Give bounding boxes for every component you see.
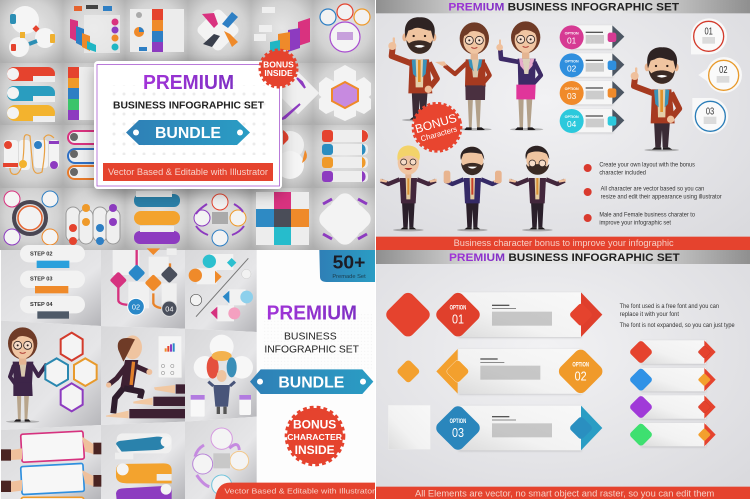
character: large man pointing (631, 47, 679, 151)
footer band (376, 237, 750, 250)
bullet 1: character included (599, 170, 646, 177)
font notes: The font used is a free font and you can (620, 303, 719, 310)
running businessman (106, 335, 152, 413)
teardrop 03: 03 (706, 106, 714, 117)
bullet 3 (584, 212, 695, 227)
footer band: Business character bonus to improve your infographic (454, 238, 674, 248)
tile: multi-ring circle (4, 191, 58, 245)
teardrop 02: 02 (719, 65, 728, 76)
tile: rotated diamond blobs (195, 7, 241, 53)
bundle ribbon (126, 120, 250, 145)
option 04: 04 (567, 119, 577, 129)
tile: four lobes (316, 190, 374, 248)
step 04: STEP 04 (30, 302, 53, 308)
header bar: PREMIUM (448, 2, 504, 14)
bonus characters badge (408, 98, 466, 156)
bullet 2: resize and edit their appearance using illustrator (601, 194, 722, 201)
title premium: PREMIUM (267, 301, 357, 324)
header bar (376, 0, 750, 14)
header bar: BUSINESS INFOGRAPHIC SET (508, 2, 679, 14)
card subtitle: BUSINESS INFOGRAPHIC SET (113, 100, 264, 112)
font notes: The font is not expanded, so you can just type (620, 322, 735, 329)
teardrop 02 (698, 57, 742, 93)
snake flow chart (110, 248, 178, 316)
bonus character seal: INSIDE (295, 443, 335, 457)
option 03 (560, 81, 624, 105)
option 01: OPTION (565, 31, 579, 35)
framed cards with hands (1, 431, 101, 499)
swatch: red diamond (383, 290, 433, 339)
step 02: STEP 02 (30, 251, 53, 257)
collage backgrounds (1, 250, 257, 499)
small banner purple (629, 395, 716, 419)
bonus character seal: CHARACTER (287, 432, 343, 442)
tile: wiggle capsules (3, 135, 59, 174)
bullet 3: Male and Female business charater to (599, 212, 695, 219)
small banner blue (629, 367, 716, 392)
cover card (94, 61, 282, 189)
teardrop 01 (691, 18, 727, 54)
option 03 banner (433, 403, 602, 453)
50+ premade badge (319, 250, 375, 282)
red tagline band: Vector Based & Editable with Illustrator (108, 167, 268, 177)
small banners (629, 340, 716, 447)
option 02: 02 (567, 63, 577, 73)
50+ premade badge: Premade Set (332, 274, 366, 280)
panel: bundle cover collage (0, 0, 375, 250)
woman with hexagons (6, 327, 47, 423)
small banner red (629, 340, 716, 364)
bundle ribbon: BUNDLE (155, 125, 221, 142)
option 03: 03 (567, 91, 577, 101)
option 02: OPTION (565, 59, 579, 63)
bundle ribbon (250, 369, 373, 394)
swatch: orange diamond (396, 359, 421, 384)
option 02 banner: OPTION (572, 362, 589, 368)
card title: PREMIUM (143, 72, 234, 94)
world map dots (263, 313, 373, 370)
character: bearded man thumbs up (444, 147, 502, 231)
stair arms (106, 384, 185, 418)
step 03: STEP 03 (30, 277, 53, 283)
bullet 3: improve your infographic set (599, 220, 671, 227)
option 03 banner: 03 (452, 425, 464, 440)
bullet 2 (584, 186, 722, 201)
option list (560, 25, 624, 133)
diagonal timeline (189, 254, 253, 321)
bonus character seal: BONUS (293, 418, 336, 432)
tile: hexagon ring (319, 65, 371, 121)
lobes with manager (191, 335, 253, 417)
small banner green (629, 422, 716, 447)
bonus character seal (287, 408, 343, 464)
red tagline band: Vector Based & Editable with Illustrator (224, 488, 376, 495)
subtitle: BUSINESS (284, 332, 337, 343)
character: woman presenting (435, 22, 492, 131)
red tagline band (103, 163, 273, 181)
character: man pointing (388, 17, 437, 121)
footer band: All Elements are vector, no smart object and raster, so you can edit them (415, 489, 714, 499)
hexagons (45, 333, 97, 411)
bundle ribbon: BUNDLE (278, 374, 344, 391)
option 02 banner: 02 (575, 368, 587, 383)
50+ premade badge: 50+ (333, 251, 365, 272)
tile: five number squares (68, 67, 94, 120)
teardrop 03 (692, 98, 728, 134)
option 01 banner (433, 290, 602, 339)
character: bearded man glasses (509, 146, 566, 231)
option 02 (560, 53, 624, 77)
red tagline band (215, 483, 376, 499)
tile: three pills (7, 67, 55, 122)
option 01 banner: OPTION (450, 306, 466, 312)
bonus inside seal: INSIDE (264, 68, 293, 78)
bullet points (584, 162, 722, 227)
option 03 banner: OPTION (450, 419, 466, 425)
tile: cycle circles (194, 194, 246, 246)
bonus inside seal: BONUS (263, 60, 294, 70)
bonus characters badge: Characters (420, 124, 458, 143)
panel: option elements (376, 250, 750, 499)
timeline card 1 (203, 254, 236, 270)
swatch: white square (388, 405, 430, 449)
footer band (376, 487, 750, 499)
bonus characters badge: BONUS (413, 111, 458, 136)
tile: circle chain (9, 6, 55, 57)
tile: overlapped circles (276, 130, 307, 179)
header bar: BUSINESS INFOGRAPHIC SET (508, 252, 680, 264)
option 01 banner: 01 (452, 312, 464, 327)
header bar: PREMIUM (449, 252, 505, 264)
tile: isometric arrows (254, 7, 310, 52)
tile: world circle (320, 4, 370, 52)
bullet 1: Create your own layout with the bonus (599, 162, 695, 169)
panel: bonus characters (376, 0, 750, 250)
snake flow chart: 02 (132, 302, 140, 311)
tile: isometric bars (70, 5, 120, 53)
panel: bundle collage with characters (0, 245, 376, 499)
tile: purple diamond (277, 72, 319, 119)
snake flow chart: 04 (165, 304, 173, 313)
pill cards (115, 433, 172, 499)
cycle circles (193, 428, 249, 495)
chart card (158, 336, 182, 378)
option 03: OPTION (565, 87, 579, 91)
option 04 (560, 109, 624, 133)
timeline card 4 (211, 305, 240, 321)
tile: ring bars (68, 131, 104, 179)
teardrop 01: 01 (704, 26, 713, 37)
character: blond man (380, 146, 437, 231)
subtitle (264, 332, 359, 355)
tile: colored pills (134, 191, 180, 244)
header bar (376, 250, 750, 264)
option 02 banner (436, 347, 605, 396)
subtitle: INFOGRAPHIC SET (264, 344, 359, 355)
tile: four option rows (322, 130, 368, 182)
tile: color puzzle grid (256, 192, 309, 245)
timeline card 3 (223, 289, 253, 305)
character: woman pointing (496, 21, 543, 131)
font notes: replace it with your font (620, 311, 679, 318)
timeline card 2 (189, 268, 222, 284)
option 01 (560, 25, 624, 49)
background tile grid (0, 0, 375, 250)
bonus inside seal (260, 50, 296, 86)
font notes (620, 303, 735, 329)
bullet 1 (584, 162, 695, 177)
tile: numbered columns (130, 9, 184, 52)
tile: vertical capsules (66, 204, 120, 245)
option 01: 01 (567, 35, 577, 45)
bullet 2: All character are vector based so you can (601, 186, 705, 193)
option 04: OPTION (565, 115, 579, 119)
step pills (20, 245, 85, 319)
